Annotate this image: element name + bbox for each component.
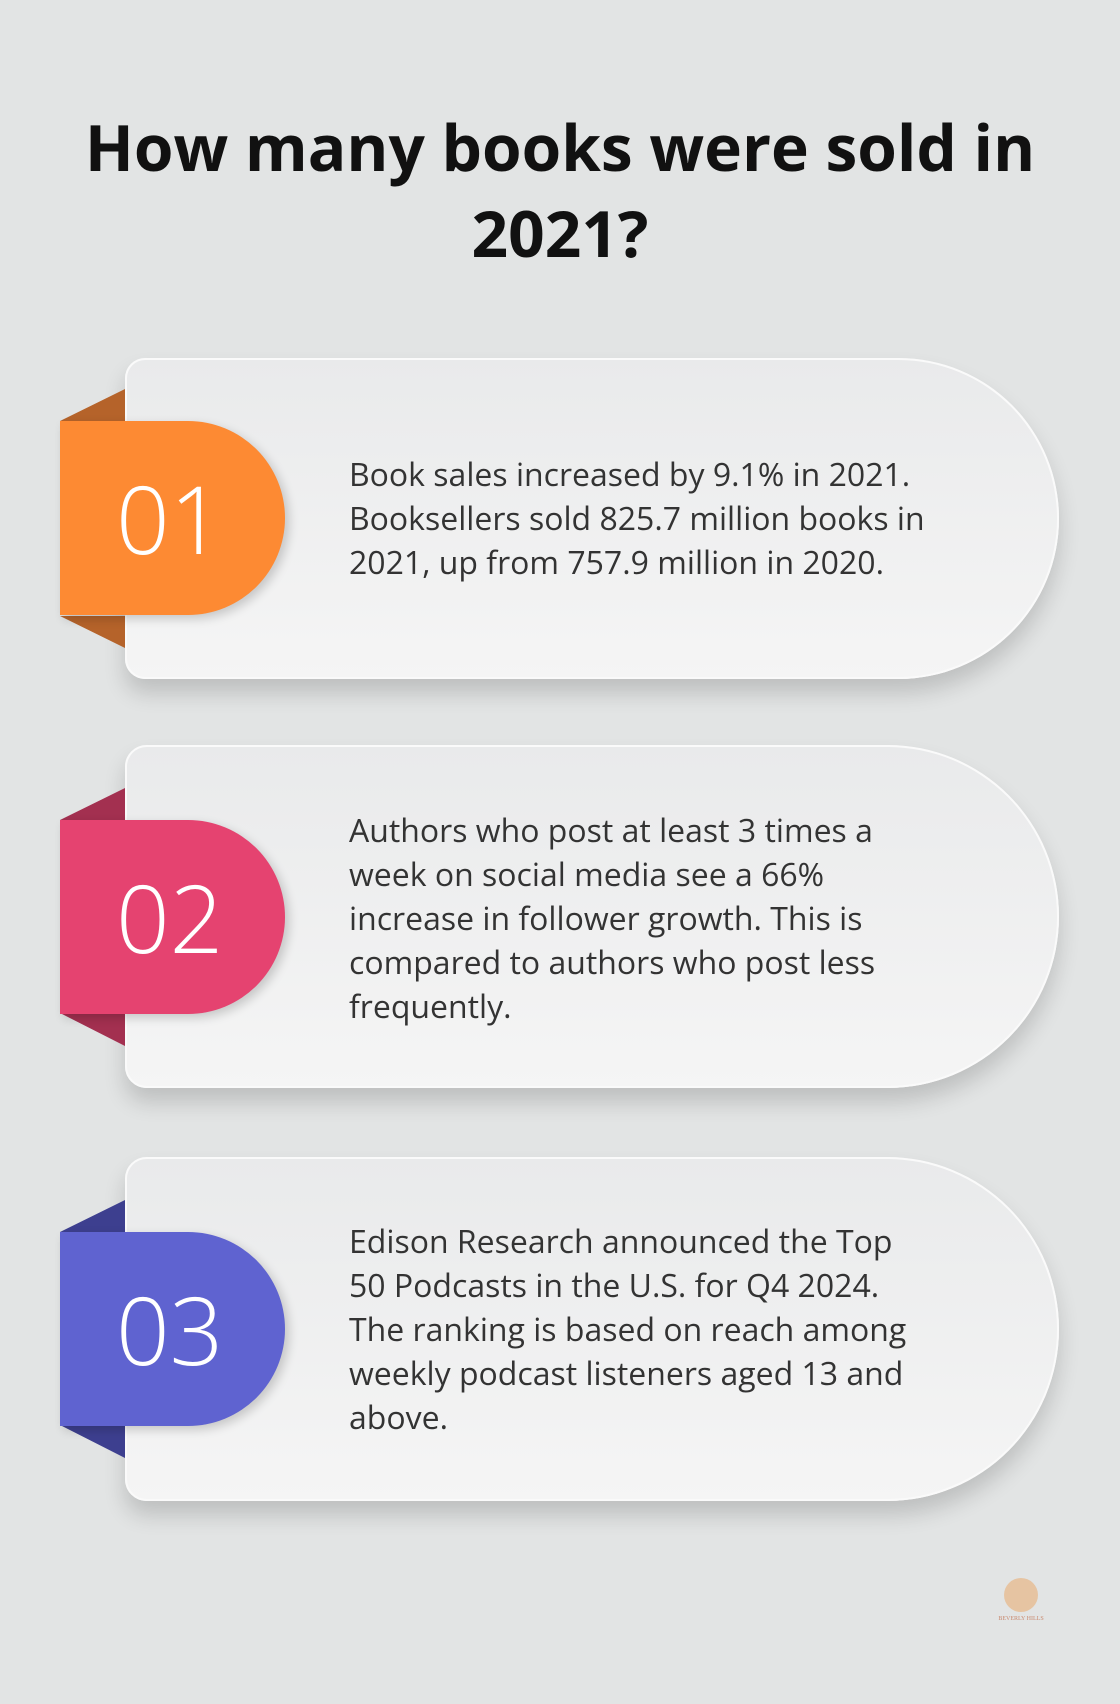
panel: card 2 [125,745,1059,1088]
text 1: Book sales increased by 9.1% in 2021. Booksellers sold 825.7 million books in 2021, up from 757.9 million in 2020. [349,453,925,584]
text 2: Authors who post at least 3 times a week on social media see a 66% increase in follower growth. This is compared to authors who post less frequently. [349,809,875,1028]
tab 03: 03 [116,1265,223,1393]
tab 01: 01 [116,454,223,582]
panel: card 1 [125,358,1059,679]
tab 03 [60,1232,285,1426]
fold 3 [60,1200,125,1458]
logo: BEVERLY HILLS [998,1616,1044,1622]
tab 01 [60,421,285,615]
title: How many books were sold in [85,103,1035,190]
panel: card 3 [125,1157,1059,1501]
fold 1 [60,389,125,648]
title [85,103,1035,276]
logo [998,1578,1044,1622]
tab 02: 02 [116,853,223,981]
tab 02 [60,820,285,1014]
fold 2 [60,788,125,1046]
text 3: Edison Research announced the Top 50 Podcasts in the U.S. for Q4 2024. The ranking is based on reach among weekly podcast listeners aged 13 and above. [349,1220,906,1439]
title: 2021? [472,189,648,276]
